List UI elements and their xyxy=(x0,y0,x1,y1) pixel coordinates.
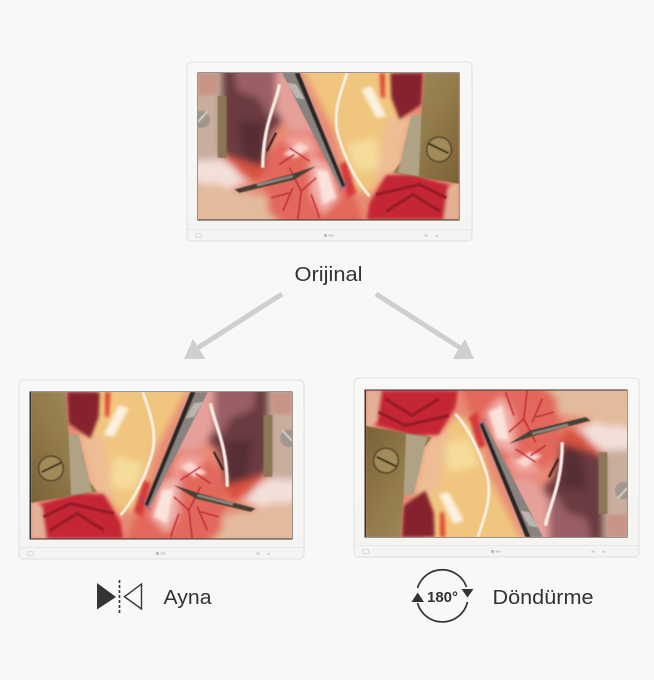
label: Döndürme: Döndürme xyxy=(492,586,594,609)
arrow: to rotated view xyxy=(376,294,474,359)
monitor: original xyxy=(187,62,472,241)
arrow: to mirrored view xyxy=(184,294,282,359)
monitor: mirrored xyxy=(19,380,304,559)
icon: rotate 180: 180° xyxy=(427,590,458,606)
monitor: rotated 180 degrees xyxy=(354,378,639,557)
heading: Orijinal: Orijinal xyxy=(294,263,362,286)
icon: rotate 180 xyxy=(412,570,474,622)
icon: mirror xyxy=(97,580,142,614)
label: Ayna: Ayna xyxy=(164,586,212,609)
